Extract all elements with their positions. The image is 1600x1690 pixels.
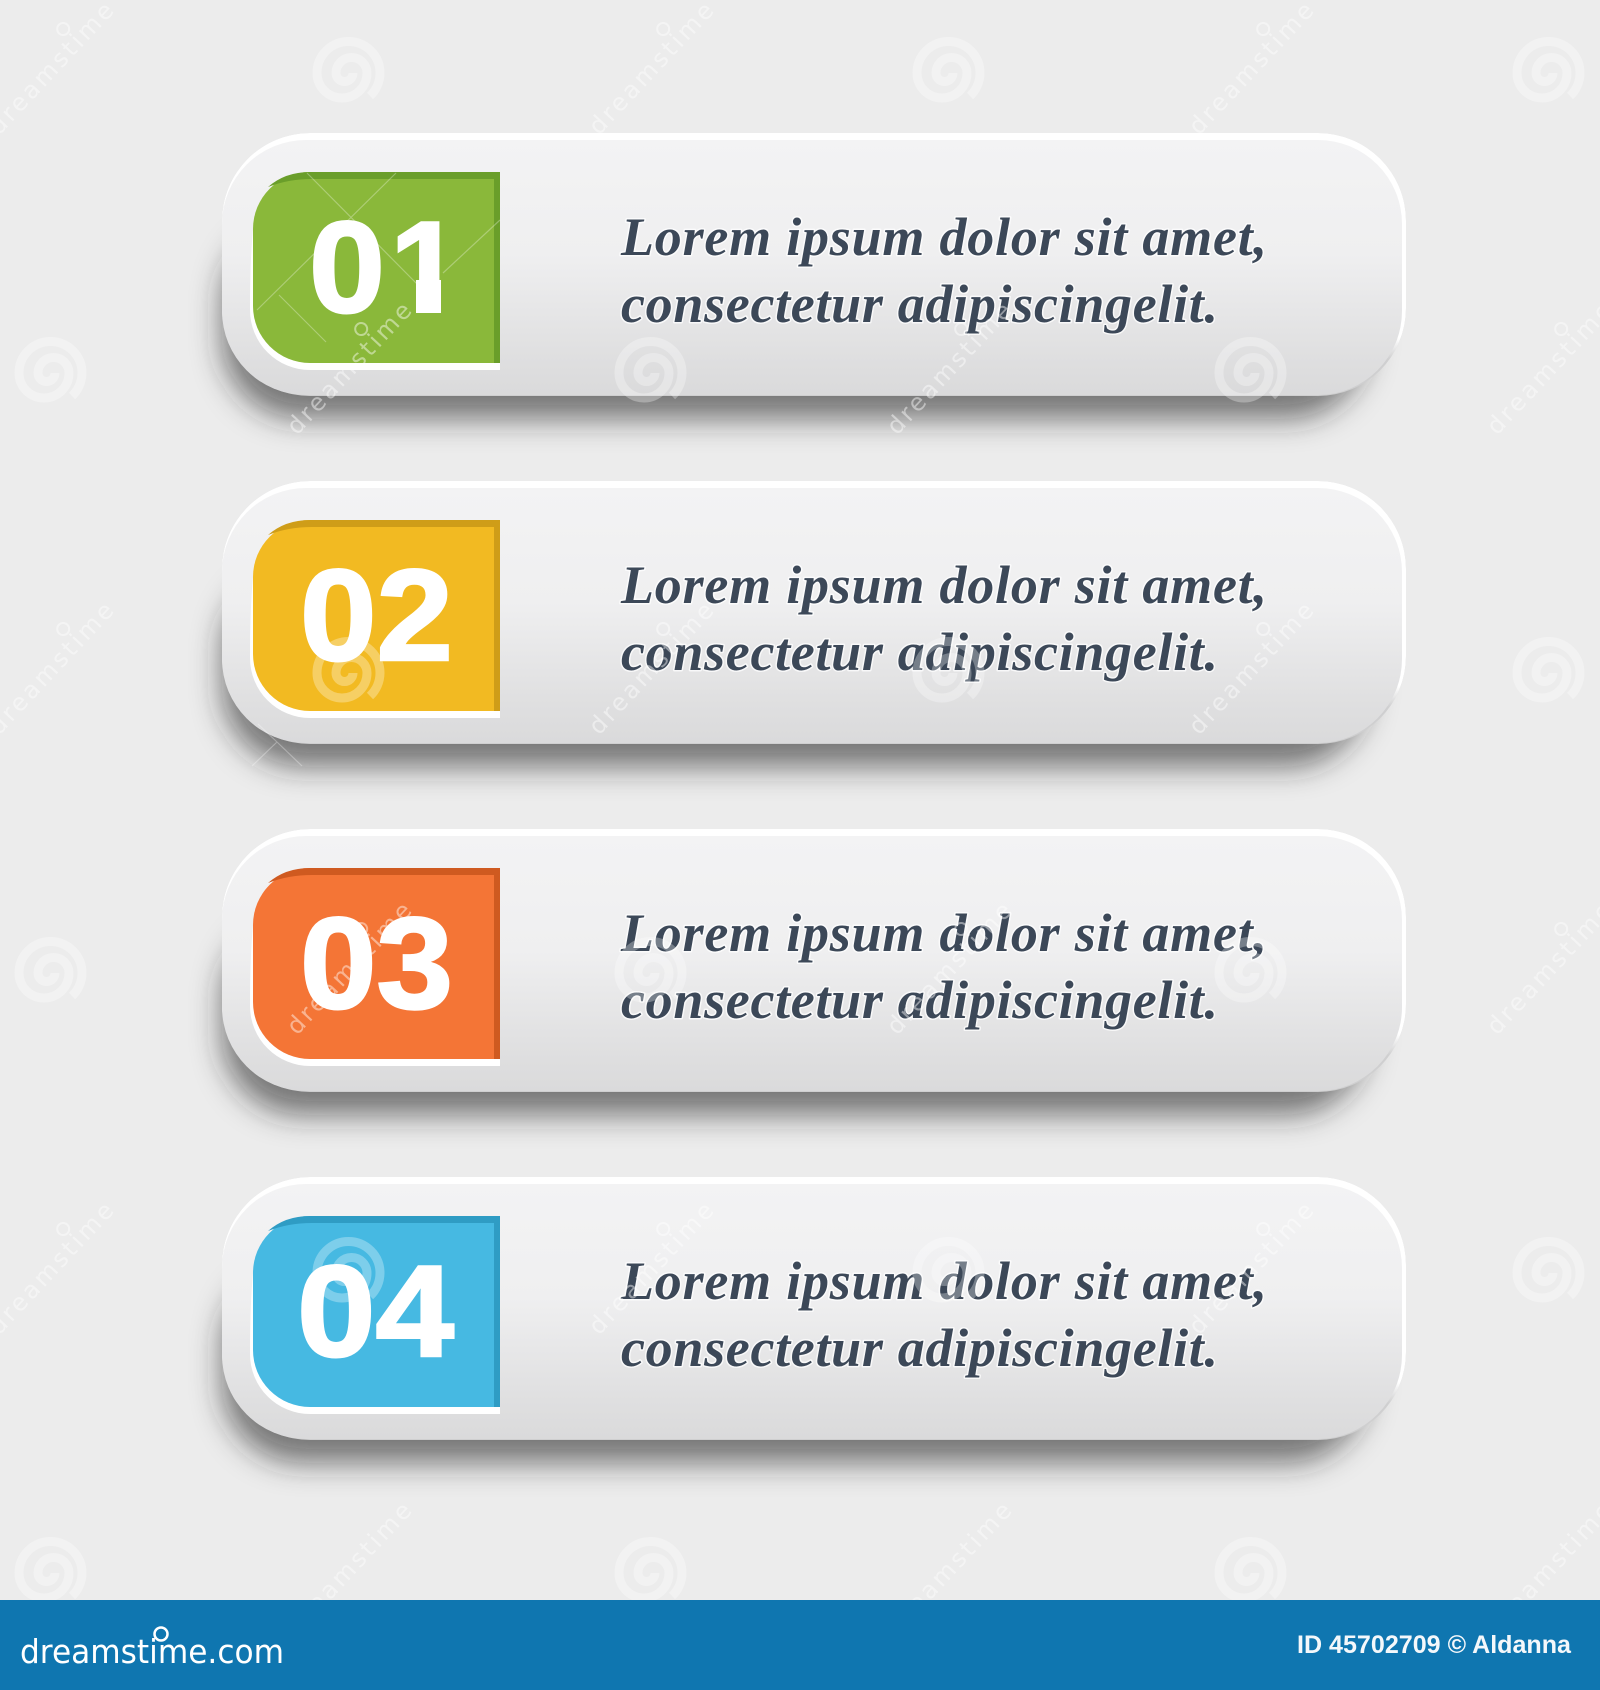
card 2 shadow: [222, 570, 1368, 767]
badge 4: [250, 1216, 500, 1414]
footer bar: [0, 1600, 1600, 1690]
text 2: Lorem ipsum dolor sit amet,: [620, 555, 1267, 615]
text 4: Lorem ipsum dolor sit amet,: [620, 1251, 1267, 1311]
watermark text: dreamstime: [583, 1197, 719, 1340]
card 1: [222, 133, 1406, 419]
number 02: 02: [300, 542, 453, 688]
number 01: [313, 220, 441, 314]
card 1 shadow: [222, 222, 1368, 419]
number 03: 03: [300, 890, 453, 1036]
text 4: consectetur adipiscingelit.: [621, 1318, 1218, 1378]
logo spiral: [154, 1628, 168, 1640]
watermark text: dreamstime: [1183, 0, 1319, 140]
watermark text: dreamstime: [881, 897, 1017, 1040]
number 01: 1: [390, 194, 462, 340]
footer credit: ID 45702709 © Aldanna: [1297, 1631, 1572, 1659]
text 3: [620, 903, 1267, 1030]
card 2 body: [222, 481, 1406, 744]
card 2: [222, 481, 1406, 767]
card 4 body: [222, 1177, 1406, 1440]
watermark text: dreamstime: [1183, 597, 1319, 740]
badge 1: [250, 172, 500, 370]
watermark text: dreamstime: [583, 0, 719, 140]
card 3 shadow: [222, 918, 1368, 1115]
badge 2: [250, 520, 500, 718]
card 3 body: [222, 829, 1406, 1092]
text 4: [620, 1251, 1267, 1378]
watermark text: dreamstime: [281, 1497, 417, 1640]
footer logo: dreamstime.com: [20, 1632, 284, 1671]
number 01: 0: [309, 194, 385, 340]
card 4: [222, 1177, 1406, 1463]
watermark text: dreamstime: [881, 297, 1017, 440]
watermark text: dreamstime: [881, 1497, 1017, 1640]
watermark text: dreamstime: [281, 297, 417, 440]
watermark text: dreamstime: [583, 597, 719, 740]
watermark cross lines: [252, 173, 500, 766]
text 3: consectetur adipiscingelit.: [621, 970, 1218, 1030]
badge 3: [250, 868, 500, 1066]
watermark text: dreamstime: [281, 897, 417, 1040]
text 1: Lorem ipsum dolor sit amet,: [620, 207, 1267, 267]
watermark text: dreamstime: [1183, 1197, 1319, 1340]
text 3: Lorem ipsum dolor sit amet,: [620, 903, 1267, 963]
text 1: [620, 207, 1267, 334]
card 3: [222, 829, 1406, 1115]
number 04: 04: [297, 1238, 454, 1384]
text 2: [620, 555, 1267, 682]
card 1 body: [222, 133, 1406, 396]
text 2: consectetur adipiscingelit.: [621, 622, 1218, 682]
card 4 shadow: [222, 1266, 1368, 1463]
text 1: consectetur adipiscingelit.: [621, 274, 1218, 334]
